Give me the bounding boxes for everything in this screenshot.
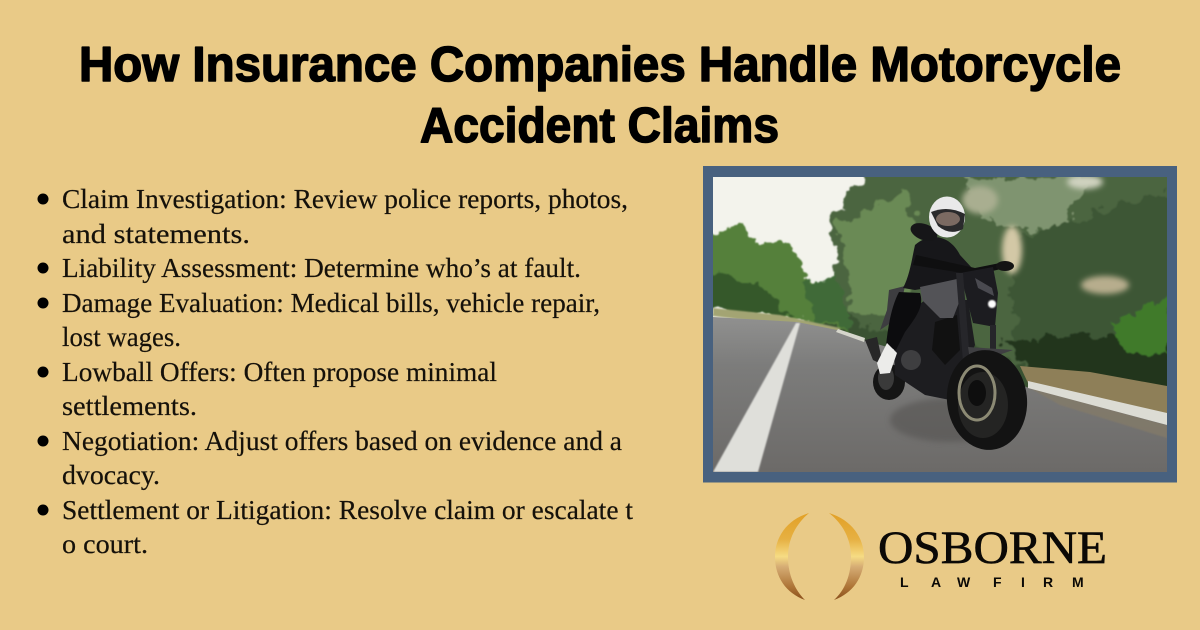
trees: right canopy	[828, 177, 1167, 386]
front cowl	[960, 267, 998, 327]
bullet: settlement or litigation: o court.	[62, 529, 148, 559]
bullet: lowball offers	[38, 357, 497, 421]
helmet	[929, 196, 965, 238]
rider arm and handlebars	[913, 255, 998, 272]
icon: gold crescents	[775, 513, 864, 600]
bullet: negotiation: dvocacy.	[62, 460, 160, 490]
logo: Osborne Law Firm	[775, 513, 1107, 600]
light gaps in foliage	[962, 175, 1129, 294]
bullet: liability assessment: Liability Assessment: Determine who’s at fault.	[62, 253, 581, 283]
title: Accident Claims	[420, 99, 779, 153]
bullet: negotiation: Negotiation: Adjust offers based on evidence and a	[62, 426, 622, 456]
title: How Insurance Companies Handle Motorcycle	[79, 38, 1121, 92]
boot	[877, 343, 897, 374]
forks	[956, 273, 969, 358]
bullet: damage evaluation	[38, 288, 600, 352]
bullet: damage evaluation: lost wages.	[62, 322, 181, 352]
photo panel: motorcyclist on road with blue frame	[700, 165, 1190, 482]
rider leg	[886, 292, 921, 350]
tail	[880, 286, 905, 330]
headlight	[988, 300, 996, 308]
wordmark: OSBORNE	[878, 522, 1107, 574]
mirror	[910, 223, 938, 240]
bullet: damage evaluation: Damage Evaluation: Medical bills, vehicle repair,	[62, 288, 600, 318]
front wheel	[946, 350, 1028, 450]
ground under foliage	[822, 309, 1028, 388]
bullet: lowball offers: Lowball Offers: Often propose minimal	[62, 357, 497, 387]
trees: left cluster	[700, 225, 850, 332]
fender	[968, 347, 1012, 354]
road curb	[836, 329, 865, 342]
tagline: LAWFIRM	[900, 574, 1084, 590]
bullet: settlement or litigation: Settlement or Litigation: Resolve claim or escalate t	[62, 495, 633, 525]
rear wheel	[873, 364, 905, 400]
bullet: lowball offers: settlements.	[62, 391, 197, 421]
grass verge	[1020, 366, 1167, 414]
bullet: claim investigation	[38, 184, 628, 249]
rider torso	[903, 237, 975, 290]
bullet: settlement or litigation	[38, 495, 633, 559]
tank	[920, 279, 960, 318]
engine block and body	[893, 300, 975, 400]
shadow	[890, 398, 966, 442]
exhaust	[865, 337, 881, 362]
motorcycle and rider	[865, 196, 1032, 454]
road	[713, 317, 1167, 472]
title	[79, 38, 1121, 153]
bulleted list: claim handling steps	[38, 184, 633, 559]
bullet: negotiation	[38, 426, 622, 490]
bullet: claim investigation: Claim Investigation: Review police reports, photos,	[62, 184, 628, 214]
sky	[713, 177, 866, 322]
lane stripe	[713, 323, 800, 472]
bullet: claim investigation: and statements.	[62, 219, 250, 249]
